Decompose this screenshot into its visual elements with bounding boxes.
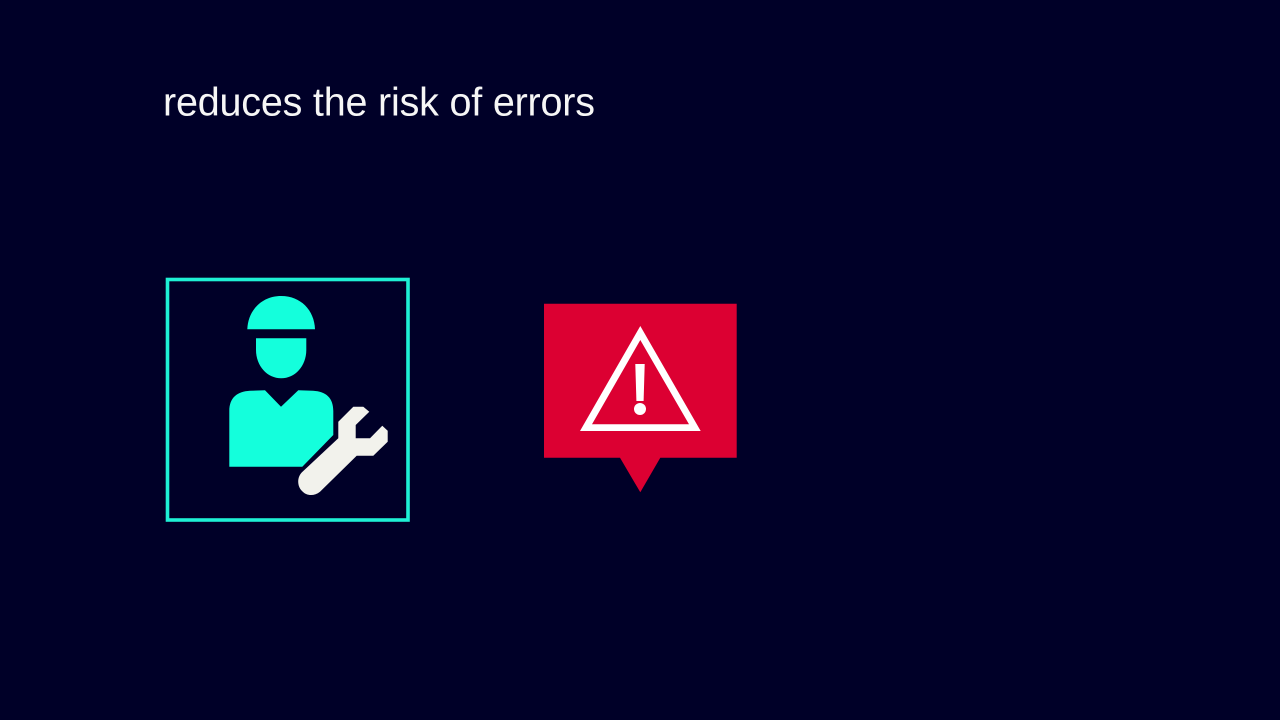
icon: wrench bbox=[298, 407, 388, 495]
icon: helmet bbox=[247, 296, 315, 329]
callout bubble bbox=[544, 304, 737, 492]
icon frame bbox=[168, 280, 408, 520]
title: reduces the risk of errors bbox=[163, 80, 595, 124]
icon: warning triangle bbox=[580, 326, 701, 431]
panel: warning callout bbox=[544, 304, 737, 492]
icon: body bbox=[229, 390, 333, 467]
icon: exclamation mark bbox=[634, 364, 646, 415]
icon: face bbox=[256, 338, 306, 378]
panel: technician icon bbox=[168, 280, 408, 520]
